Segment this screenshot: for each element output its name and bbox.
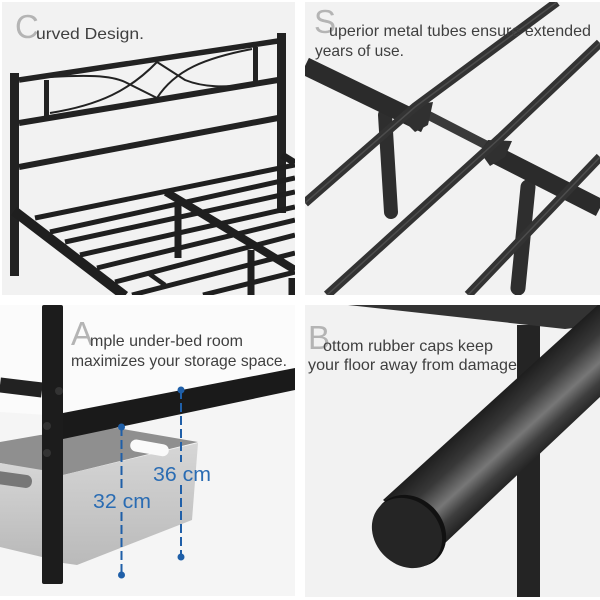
bed headboard xyxy=(14,33,282,276)
caption: storage: A xyxy=(71,315,93,352)
square support bar xyxy=(305,66,600,208)
caption: rubber caps: B xyxy=(308,319,330,356)
label 32 cm: 32 cm xyxy=(93,491,151,513)
panel: rubber caps xyxy=(305,303,600,597)
height marker 36 cm xyxy=(178,386,184,560)
rubber cap xyxy=(372,495,446,568)
rear rail xyxy=(0,385,42,390)
caption: curved design xyxy=(16,14,142,42)
panel: metal tubes xyxy=(305,2,600,295)
bed legs xyxy=(385,115,528,288)
top bar xyxy=(348,305,600,329)
vertical post xyxy=(517,325,540,597)
caption: metal tubes xyxy=(315,10,590,60)
mattress xyxy=(0,305,295,416)
panel: under-bed storage xyxy=(0,305,295,596)
caption: curved design: C xyxy=(15,8,39,45)
caption: storage: maximizes your storage space. xyxy=(71,353,287,370)
bed post xyxy=(42,305,63,584)
tube brackets xyxy=(405,102,512,166)
bed side rail xyxy=(63,368,295,439)
label 36 cm: 36 cm xyxy=(153,464,211,486)
caption: storage xyxy=(71,322,286,370)
panel: curved design xyxy=(2,2,295,296)
bed slats and frame xyxy=(14,155,295,296)
storage basket xyxy=(0,428,198,565)
tube xyxy=(383,303,600,545)
caption: metal tubes: uperior metal tubes ensure extended xyxy=(329,23,591,40)
post bolts xyxy=(43,387,63,457)
caption: curved design: urved Design. xyxy=(36,26,144,43)
caption: rubber caps: your floor away from damage xyxy=(308,357,517,374)
caption: rubber caps: ottom rubber caps keep xyxy=(323,338,493,355)
caption: metal tubes: S xyxy=(314,3,336,40)
caption: rubber caps xyxy=(308,326,516,374)
caption: metal tubes: years of use. xyxy=(315,43,404,60)
metal tube rails xyxy=(305,2,600,295)
caption: storage: mple under-bed room xyxy=(90,333,243,350)
height marker 32 cm xyxy=(118,424,125,578)
